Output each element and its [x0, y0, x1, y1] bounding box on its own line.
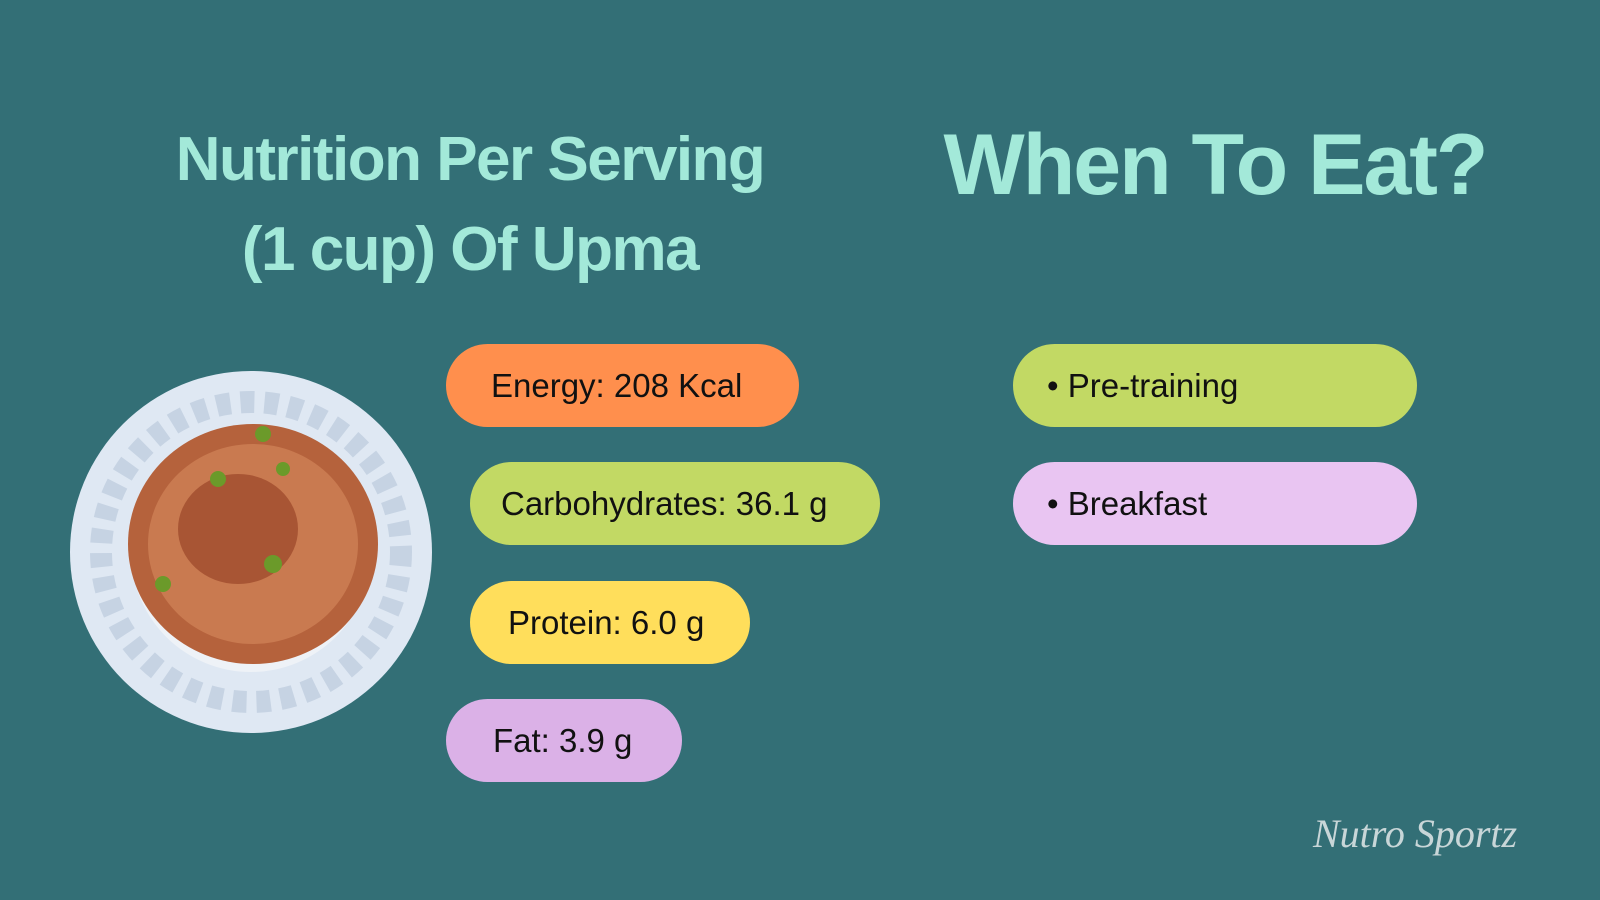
title: nutrition: (1 cup) Of Upma [242, 215, 698, 284]
title: when to eat: When To Eat? [944, 117, 1486, 213]
pill: pre-training [1013, 344, 1417, 427]
pill: energy [446, 344, 799, 427]
pill: carbohydrates: Carbohydrates: 36.1 g [501, 485, 828, 522]
image: upma plate [70, 371, 432, 733]
title: nutrition: Nutrition Per Serving [176, 125, 764, 194]
pill: carbohydrates [470, 462, 880, 545]
pill: energy: Energy: 208 Kcal [491, 367, 742, 404]
pill: fat [446, 699, 682, 782]
pill: protein: Protein: 6.0 g [508, 604, 704, 641]
logo: Nutro Sportz [1313, 811, 1517, 856]
pill: pre-training: • Pre-training [1047, 367, 1238, 404]
pill: protein [470, 581, 750, 664]
pill: fat: Fat: 3.9 g [493, 722, 632, 759]
pill: breakfast: • Breakfast [1047, 485, 1207, 522]
pill: breakfast [1013, 462, 1417, 545]
title: nutrition [176, 125, 764, 284]
